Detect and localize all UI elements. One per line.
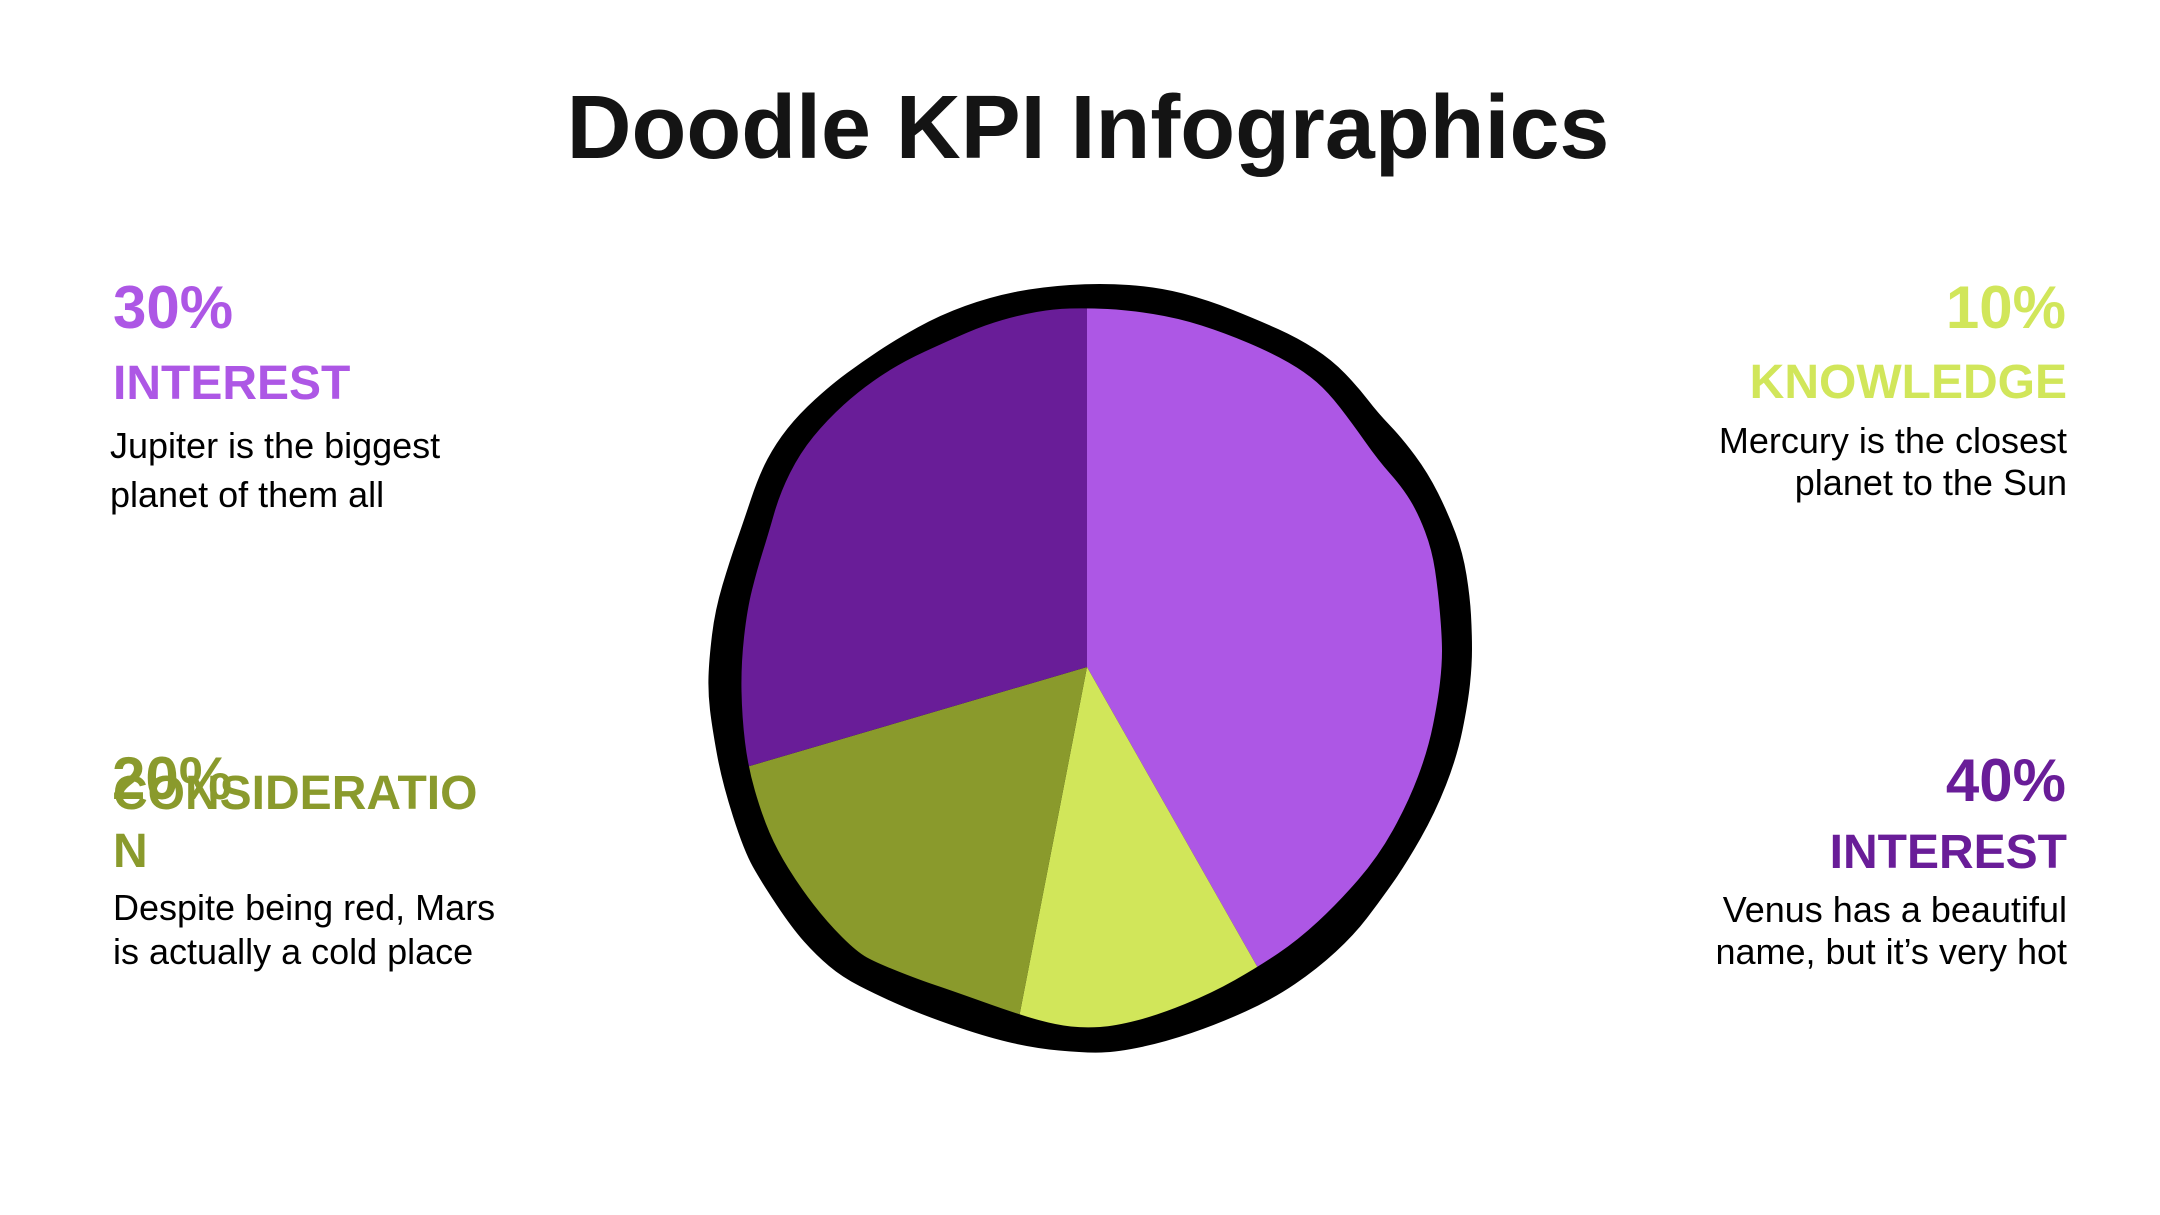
heading: INTEREST <box>1830 826 2067 879</box>
panel: 10% knowledge <box>1719 274 2067 503</box>
description: Mercury is the closest <box>1719 420 2067 461</box>
panel: 30% interest <box>110 274 440 515</box>
slice: 10% lime <box>1020 667 1258 1028</box>
slice: 30% dark purple <box>741 308 1087 766</box>
panel: 40% interest <box>1715 747 2067 972</box>
slice: 20% olive <box>749 667 1087 1014</box>
heading: N <box>113 825 148 878</box>
description: Despite being red, Mars <box>113 887 495 928</box>
value: 20% <box>112 745 232 812</box>
heading: INTEREST <box>113 357 350 410</box>
description: planet of them all <box>110 474 384 515</box>
value: 30% <box>113 274 233 341</box>
slice: 40% light purple <box>1087 308 1442 967</box>
description: is actually a cold place <box>113 931 473 972</box>
heading: KNOWLEDGE <box>1750 356 2067 409</box>
value: 10% <box>1946 274 2066 341</box>
description: name, but it’s very hot <box>1715 931 2067 972</box>
heading: CONSIDERATIO <box>113 767 477 820</box>
panel: 20% consideration <box>112 745 495 972</box>
pie slices <box>741 308 1442 1028</box>
value: 40% <box>1946 747 2066 814</box>
description: planet to the Sun <box>1795 462 2067 503</box>
description: Jupiter is the biggest <box>110 425 440 466</box>
pie chart with doodle outline <box>708 284 1472 1053</box>
title: Doodle KPI Infographics <box>567 78 1609 178</box>
doodle outline <box>708 284 1472 1053</box>
description: Venus has a beautiful <box>1723 889 2067 930</box>
